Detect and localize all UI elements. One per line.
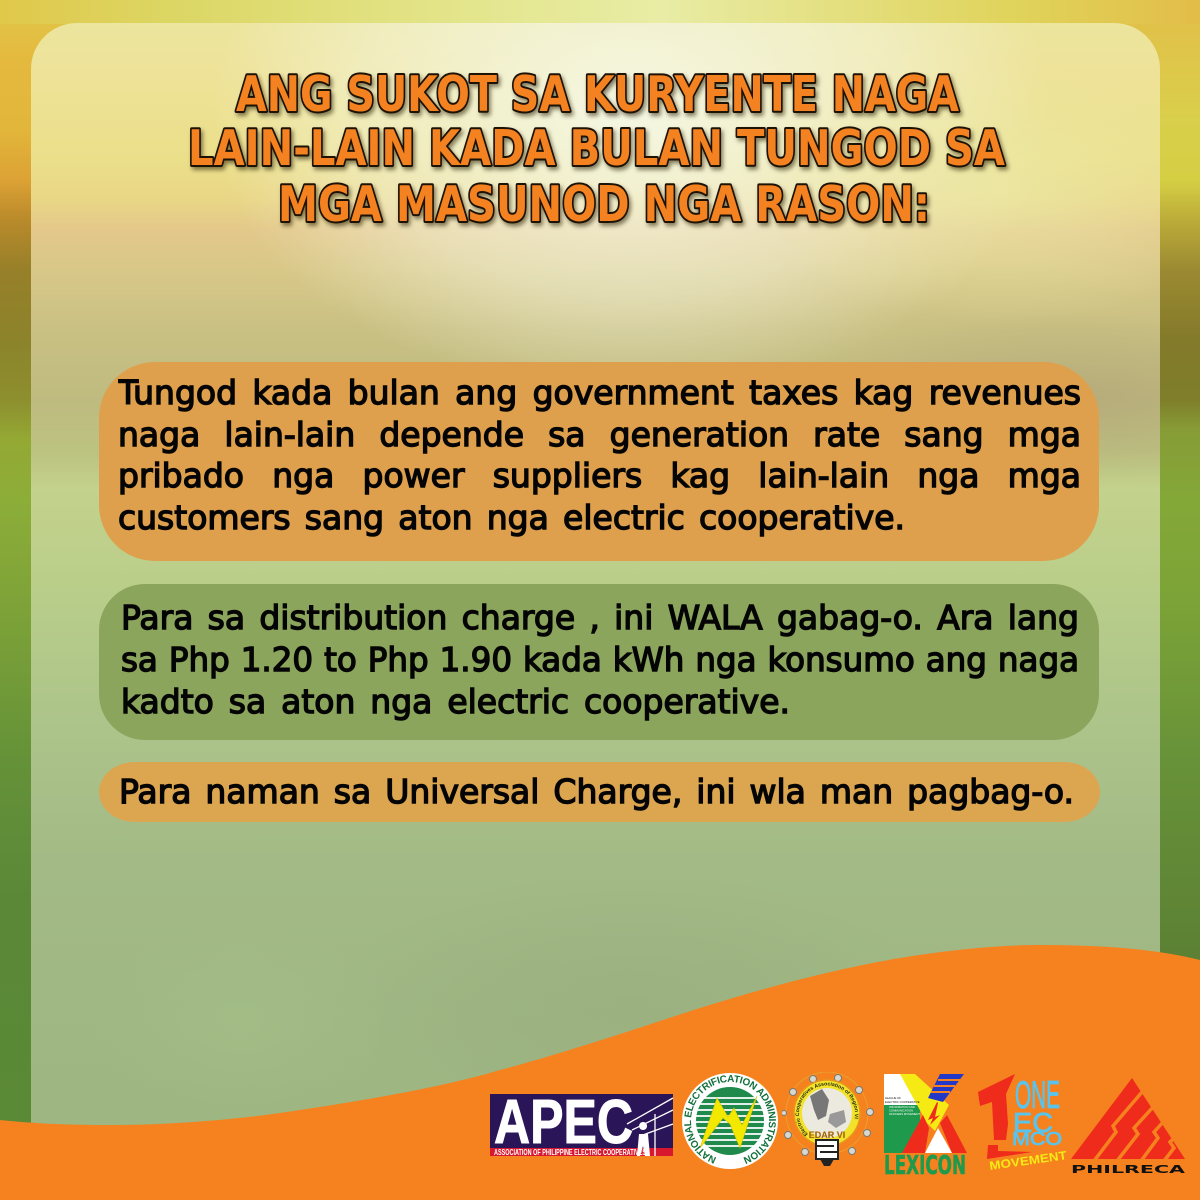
logo: LEXICON: LEAGUE OF [885, 1096, 901, 1100]
text block: government taxes [118, 373, 1081, 537]
logo: 1 EC MCO Movement [978, 1074, 1068, 1173]
text block: government taxes: naga lain-lain depende sa generation rate sang mga [118, 415, 1081, 454]
background left side [0, 0, 600, 1200]
text block: distribution charge [121, 598, 1079, 721]
logo: PHILRECA [1071, 1078, 1186, 1176]
logo: EDAR lightbulb: Electric Cooperatives Association of Region VI [795, 1082, 859, 1136]
text block: distribution charge: sa Php 1.20 to Php 1.90 kada kWh nga konsumo ang naga [121, 641, 1079, 679]
panel: universal charge note [99, 762, 1100, 822]
text block: distribution charge: kadto sa aton nga electric cooperative. [121, 682, 790, 721]
text block: government taxes: pribado nga power suppliers kag lain-lain nga mga [118, 456, 1081, 495]
logo: LEXICON [884, 1074, 967, 1178]
background right side [600, 0, 1200, 1200]
title: LAIN-LAIN KADA BULAN TUNGOD SA [188, 120, 1005, 177]
title: ANG SUKOT SA KURYENTE NAGA [236, 66, 959, 123]
text block: universal charge: Para naman sa Universal Charge, ini wla man pagbag-o. [119, 772, 1074, 811]
panel: distribution charge note [99, 584, 1099, 740]
logo: 1 EC MCO Movement: EC [1013, 1107, 1053, 1138]
logo: LEXICON: OFFICERS MOVEMENT [889, 1112, 920, 1116]
logo: LEXICON: COMMUNICATION [889, 1108, 913, 1112]
text block: government taxes: customers sang aton nga electric cooperative. [118, 498, 905, 537]
text block: distribution charge: Para sa distribution charge , ini WALA gabag-o. Ara lang [121, 598, 1079, 637]
logo: 1 EC MCO Movement: MOVEMENT [988, 1148, 1068, 1173]
background top band [0, 0, 1200, 24]
logo: LEXICON: ELECTRIC COOPERATIVE [885, 1100, 920, 1104]
logo: EDAR lightbulb [782, 1072, 874, 1166]
logo: 1 EC MCO Movement: MCO [1012, 1129, 1062, 1149]
title: MGA MASUNOD NGA RASON: [278, 176, 930, 233]
logo: PHILRECA: PHILRECA [1071, 1163, 1186, 1176]
logo: LEXICON: INFORMATION AND [889, 1105, 915, 1109]
logo: EDAR lightbulb: EDAR VI [809, 1130, 845, 1140]
title [188, 66, 1011, 233]
text block: government taxes: Tungod kada bulan ang government taxes kag revenues [118, 373, 1081, 412]
panel: government taxes note [99, 362, 1099, 561]
logo: National Electrification Administration: NATIONAL ELECTRIFICATION ADMINISTRATION [684, 1075, 776, 1164]
